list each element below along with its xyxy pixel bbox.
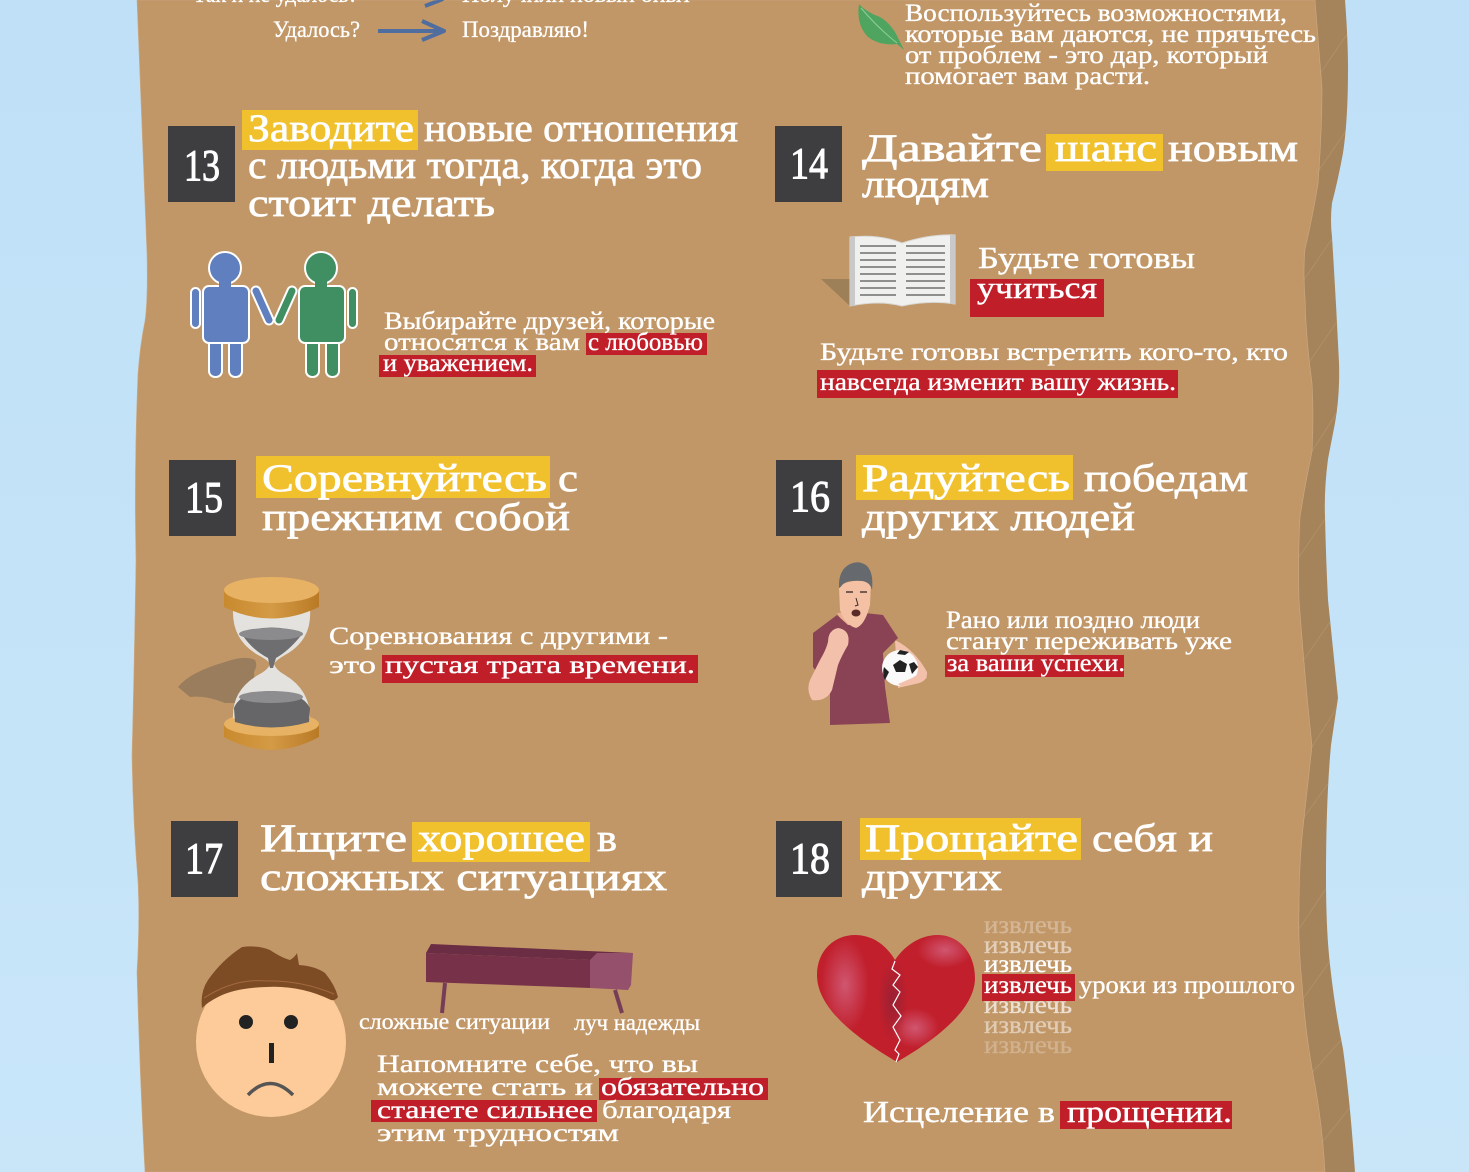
chart: tunnel with light [426,944,633,1013]
heading 14: людям [862,163,989,206]
text: lessons: извлечь [984,951,1072,978]
heading 17: хорошее [418,817,585,860]
top-left leftover: outcomes: Поздравляю! [462,17,589,42]
text 17: обязательно [601,1074,764,1101]
heading 18 [860,817,1213,899]
top-left leftover: outcomes: Удалось? [273,17,360,42]
text 16: за ваши успехи. [947,650,1125,677]
text 13: и уважением. [383,350,533,377]
heading 14 [862,127,1298,206]
panel 17 [171,817,768,1147]
heading 14: шанс [1055,127,1157,170]
text: lessons: извлечь [984,932,1072,959]
icon: hourglass [178,577,319,750]
icon: football player [808,562,927,725]
heading 15: Соревнуйтесь [262,457,547,500]
panel 15 [169,456,698,750]
text 17: благодаря [602,1097,732,1124]
number 13 [168,126,235,202]
panel 13 [168,107,738,377]
heading 17 [260,817,668,899]
text 15 [329,623,698,683]
heading 13: с людьми тогда, когда это [248,144,702,187]
heading 17: в [597,817,617,860]
text 15: Соревнования с другими - [329,623,668,650]
number 13: 13 [184,141,220,190]
text 16: станут переживать уже [946,628,1232,655]
heading 16: Радуйтесь [862,457,1070,500]
top-left leftover: outcomes [193,0,692,42]
text 18 [863,1094,1232,1129]
text 16: Рано или поздно люди [946,607,1200,634]
heading 16: других людей [862,496,1135,539]
heading 18: других [862,856,1003,899]
number 18: 18 [790,834,830,883]
top-right leftover: opportunities: от проблем - это дар, который [905,42,1268,69]
top-right leftover: opportunities: Воспользуйтесь возможностями, [905,0,1287,27]
labels: tunnel: луч надежды [574,1010,700,1035]
text 15: это [329,652,376,679]
heading 18: себя и [1092,817,1213,860]
top-right leftover: opportunities: помогает вам расти. [905,63,1150,90]
text 17 [371,1051,768,1147]
text 14: навсегда изменит вашу жизнь. [820,369,1176,396]
icon: sad face with cap [196,946,346,1117]
heading 14: Давайте [862,127,1042,170]
heading 17: сложных ситуациях [260,856,668,899]
top-right leftover: opportunities: которые вам даются, не прячьтесь [905,21,1316,48]
text 17: станете сильнее [377,1097,593,1124]
number 14 [775,126,842,202]
number 18 [776,821,842,897]
text 15: пустая трата времени. [385,652,695,679]
text: lessons: извлечь [984,992,1072,1019]
text 13 [379,308,715,377]
heading 15: прежним собой [262,496,570,539]
paper back strip [1299,0,1355,1172]
number 17: 17 [185,834,223,883]
labels: tunnel: сложные ситуации [359,1009,550,1034]
icon: two people holding hands [191,252,357,377]
text 14 [817,339,1288,398]
heading 14: новым [1168,127,1298,170]
text: lessons: извлечь [984,912,1072,939]
text 18: Исцеление в [863,1094,1055,1129]
panel 18 [776,817,1295,1129]
text 13: Выбирайте друзей, которые [384,308,715,335]
heading 13 [242,107,738,225]
heading 15 [256,456,578,539]
text 14: Будьте готовы встретить кого-то, кто [820,339,1288,366]
text 17: можете стать и [377,1074,593,1101]
text 13: относятся к вам [384,329,580,356]
text 17: Напомните себе, что вы [377,1051,698,1078]
panel 16 [776,455,1248,725]
number 14: 14 [790,139,828,188]
panel 14 [775,126,1298,398]
heading 13: новые отношения [424,107,738,150]
top-right leftover: opportunities [858,0,1316,90]
labels: tunnel [359,1009,700,1035]
icon: broken heart [817,932,975,1062]
heading 16: победам [1084,457,1248,500]
number 16 [776,460,842,536]
arrow [378,21,444,40]
heading 18: Прощайте [865,817,1078,860]
text 13: с любовью [588,329,703,356]
number 17 [171,821,238,897]
heading 13: Заводите [248,107,414,150]
number 15: 15 [185,473,223,522]
text: lessons: извлечь [984,1032,1072,1059]
text: be ready to learn: Будьте готовы [978,240,1195,275]
heading 16 [856,455,1248,539]
text 16 [945,607,1232,677]
text: lessons [982,912,1295,1059]
text: lessons: уроки из прошлого [1079,972,1295,999]
text 18: прощении. [1067,1094,1232,1129]
text: be ready to learn [970,240,1195,317]
text 17: этим трудностям [377,1120,619,1147]
text: be ready to learn: учиться [977,270,1097,305]
number 16: 16 [790,472,830,521]
heading 13: стоит делать [248,182,495,225]
number 15 [169,460,236,536]
icon: open book [821,235,955,306]
icon: leaf [858,4,904,50]
text: lessons: извлечь [984,972,1072,999]
text: lessons: извлечь [984,1012,1072,1039]
heading 17: Ищите [260,817,407,860]
heading 15: с [558,457,578,500]
